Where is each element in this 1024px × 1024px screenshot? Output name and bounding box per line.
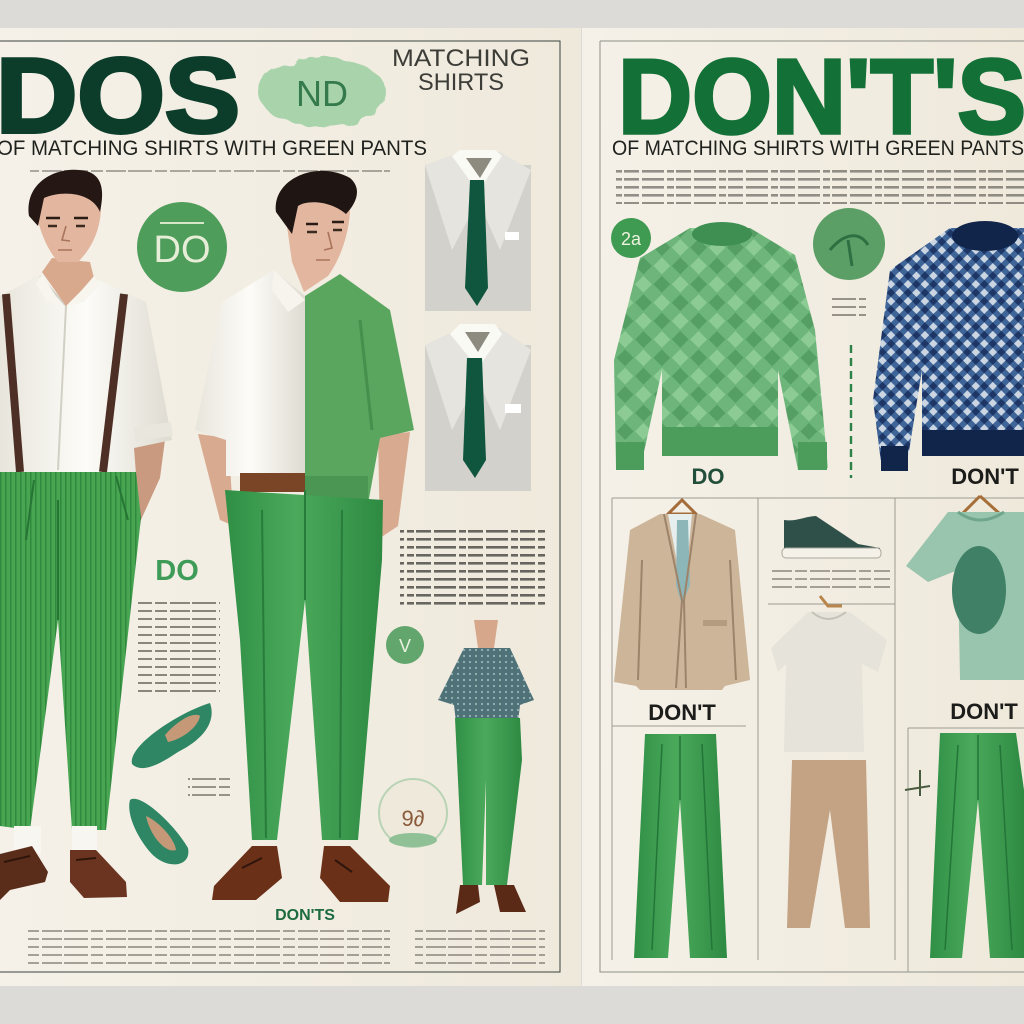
- icon: green sweater: [614, 222, 828, 470]
- icon: small green circle: [386, 626, 424, 664]
- badge: ND watercolor: [258, 57, 386, 127]
- icon: sneaker: [782, 516, 881, 558]
- icon: magnifier circle: [379, 779, 447, 847]
- shoes: [0, 846, 48, 900]
- belt: [240, 473, 305, 492]
- subtitle: OF MATCHING SHIRTS WITH GREEN PANTS: [0, 137, 427, 160]
- trousers: [225, 490, 383, 840]
- green half: [305, 274, 414, 504]
- icon: small green circle: V: [399, 636, 411, 656]
- arm skin: [130, 432, 166, 522]
- figure: small man patterned shirt: [438, 620, 534, 914]
- icon: blue sweater: [873, 221, 1024, 471]
- grid panel outlines: [612, 498, 1024, 972]
- text block under subtitle: [30, 166, 390, 174]
- label: DON'T: DON'T: [951, 464, 1019, 489]
- shirt: [0, 272, 172, 474]
- badge: plant circle: [813, 208, 885, 280]
- text block: right column: [400, 530, 545, 608]
- icon: beige blazer: [614, 500, 750, 690]
- icon: small plant: [905, 770, 930, 796]
- socks: [14, 826, 41, 854]
- icon: teal t-shirt: [906, 496, 1024, 680]
- text block: intro: [616, 170, 1024, 204]
- icon: magnifier circle: 9∂: [401, 806, 425, 831]
- text block: shoe note: [772, 568, 890, 594]
- badge: number: [611, 218, 651, 258]
- label: DO: DO: [692, 464, 724, 489]
- panel: left page: [0, 28, 581, 986]
- heading: matching shirts: [392, 45, 530, 96]
- suspenders: [6, 294, 124, 472]
- text block: middle left: [138, 602, 220, 697]
- panel: right page: [582, 28, 1024, 986]
- figure: half shirt half sweater man: [195, 171, 414, 902]
- shoes: [212, 846, 282, 900]
- label: DON'T: DON'T: [950, 699, 1018, 724]
- icon: white t-shirt: [771, 596, 887, 752]
- badge: DO circle: DO: [154, 229, 210, 271]
- icon: green loafer upper: [132, 703, 212, 768]
- icon: folded shirt top: [425, 150, 531, 311]
- text block: small note: [188, 772, 230, 798]
- icon: folded shirt bottom: [425, 324, 531, 491]
- white half: [195, 270, 305, 476]
- heading: DOS: DOS: [0, 37, 240, 155]
- label: DO: DO: [155, 555, 199, 587]
- figure: man in suspenders: [0, 170, 173, 900]
- badge: ND watercolor: ND: [296, 73, 348, 114]
- text block: small note: [832, 295, 866, 321]
- badge: DO circle: [137, 202, 227, 292]
- trousers: [0, 472, 141, 830]
- text block: bottom right: [415, 930, 545, 964]
- badge: number: 2a: [621, 229, 642, 249]
- icon: beige trousers: [787, 760, 870, 928]
- icon: green loafer lower: [129, 799, 188, 864]
- label: DON'T: DON'T: [648, 700, 716, 725]
- label: DON'TS: DON'TS: [275, 907, 335, 924]
- heading: matching shirts: SHIRTS: [418, 69, 504, 96]
- icon: green trousers left: [634, 734, 727, 958]
- head: [284, 187, 350, 292]
- icon: green trousers right: [930, 733, 1024, 958]
- heading: matching shirts: MATCHING: [392, 45, 530, 72]
- text block: bottom left: [28, 930, 390, 964]
- divider: dotted stem: [850, 345, 852, 478]
- forearms: [198, 432, 410, 538]
- head: [34, 181, 101, 262]
